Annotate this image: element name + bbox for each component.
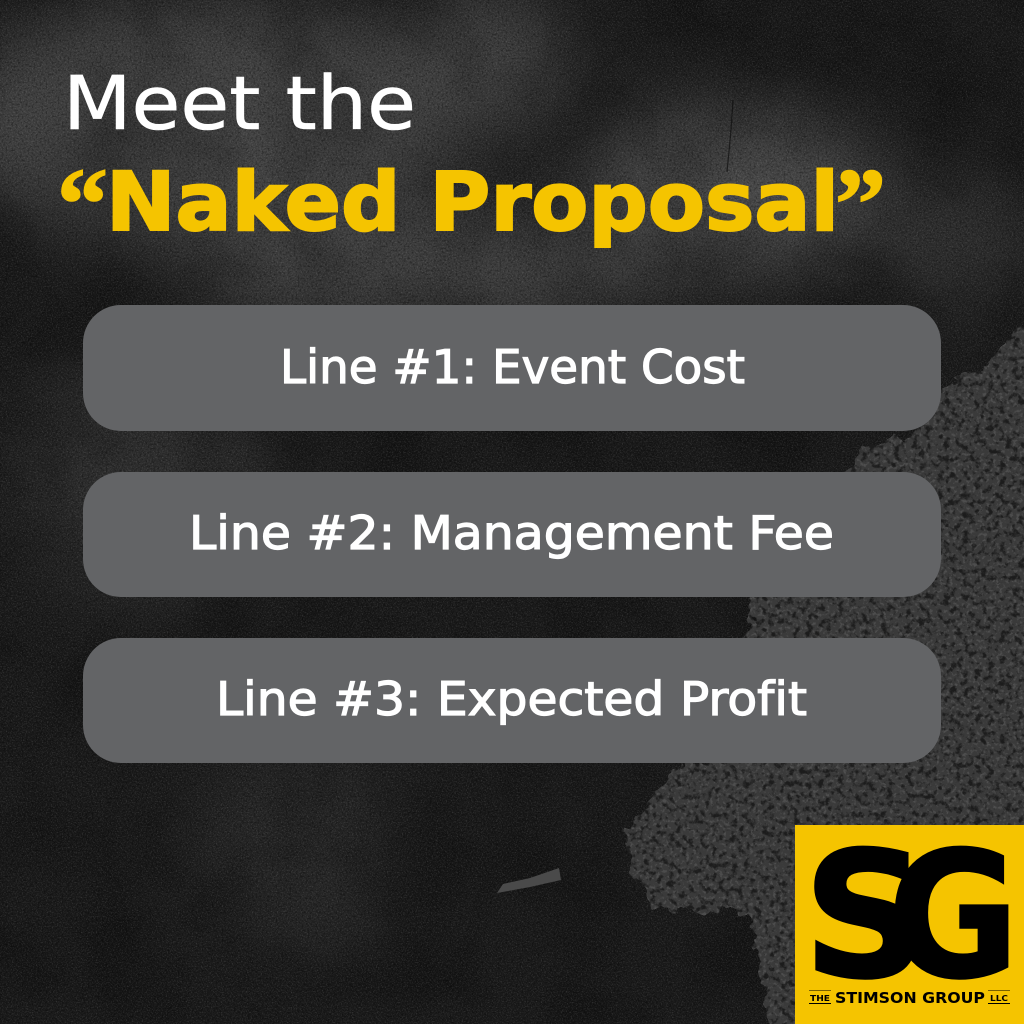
logo monogram: SG <box>803 815 1019 1018</box>
heading line: Naked Proposal: ” <box>835 148 886 261</box>
heading line: Naked Proposal: Naked Proposal <box>106 156 839 250</box>
panel: line 2: Line #2: Management Fee <box>189 506 834 560</box>
panel: line 2 <box>83 472 941 597</box>
logo: The Stimson Group <box>795 815 1024 1024</box>
panel: line 3 <box>83 638 941 763</box>
heading line: Meet the: Meet the <box>63 61 416 147</box>
logo monogram: SG: S <box>803 815 928 1018</box>
background: rough plaster patch <box>622 326 1024 1024</box>
heading line: Naked Proposal: “ <box>57 148 108 261</box>
title <box>57 61 886 261</box>
logo wordmark: THE <box>810 994 830 1003</box>
logo wordmark: STIMSON GROUP <box>835 989 985 1007</box>
panel: line 1 <box>83 305 941 431</box>
panel: line 1: Line #1: Event Cost <box>280 340 745 394</box>
logo wordmark: LLC <box>990 994 1008 1003</box>
panel: line 3: Line #3: Expected Profit <box>216 672 807 726</box>
